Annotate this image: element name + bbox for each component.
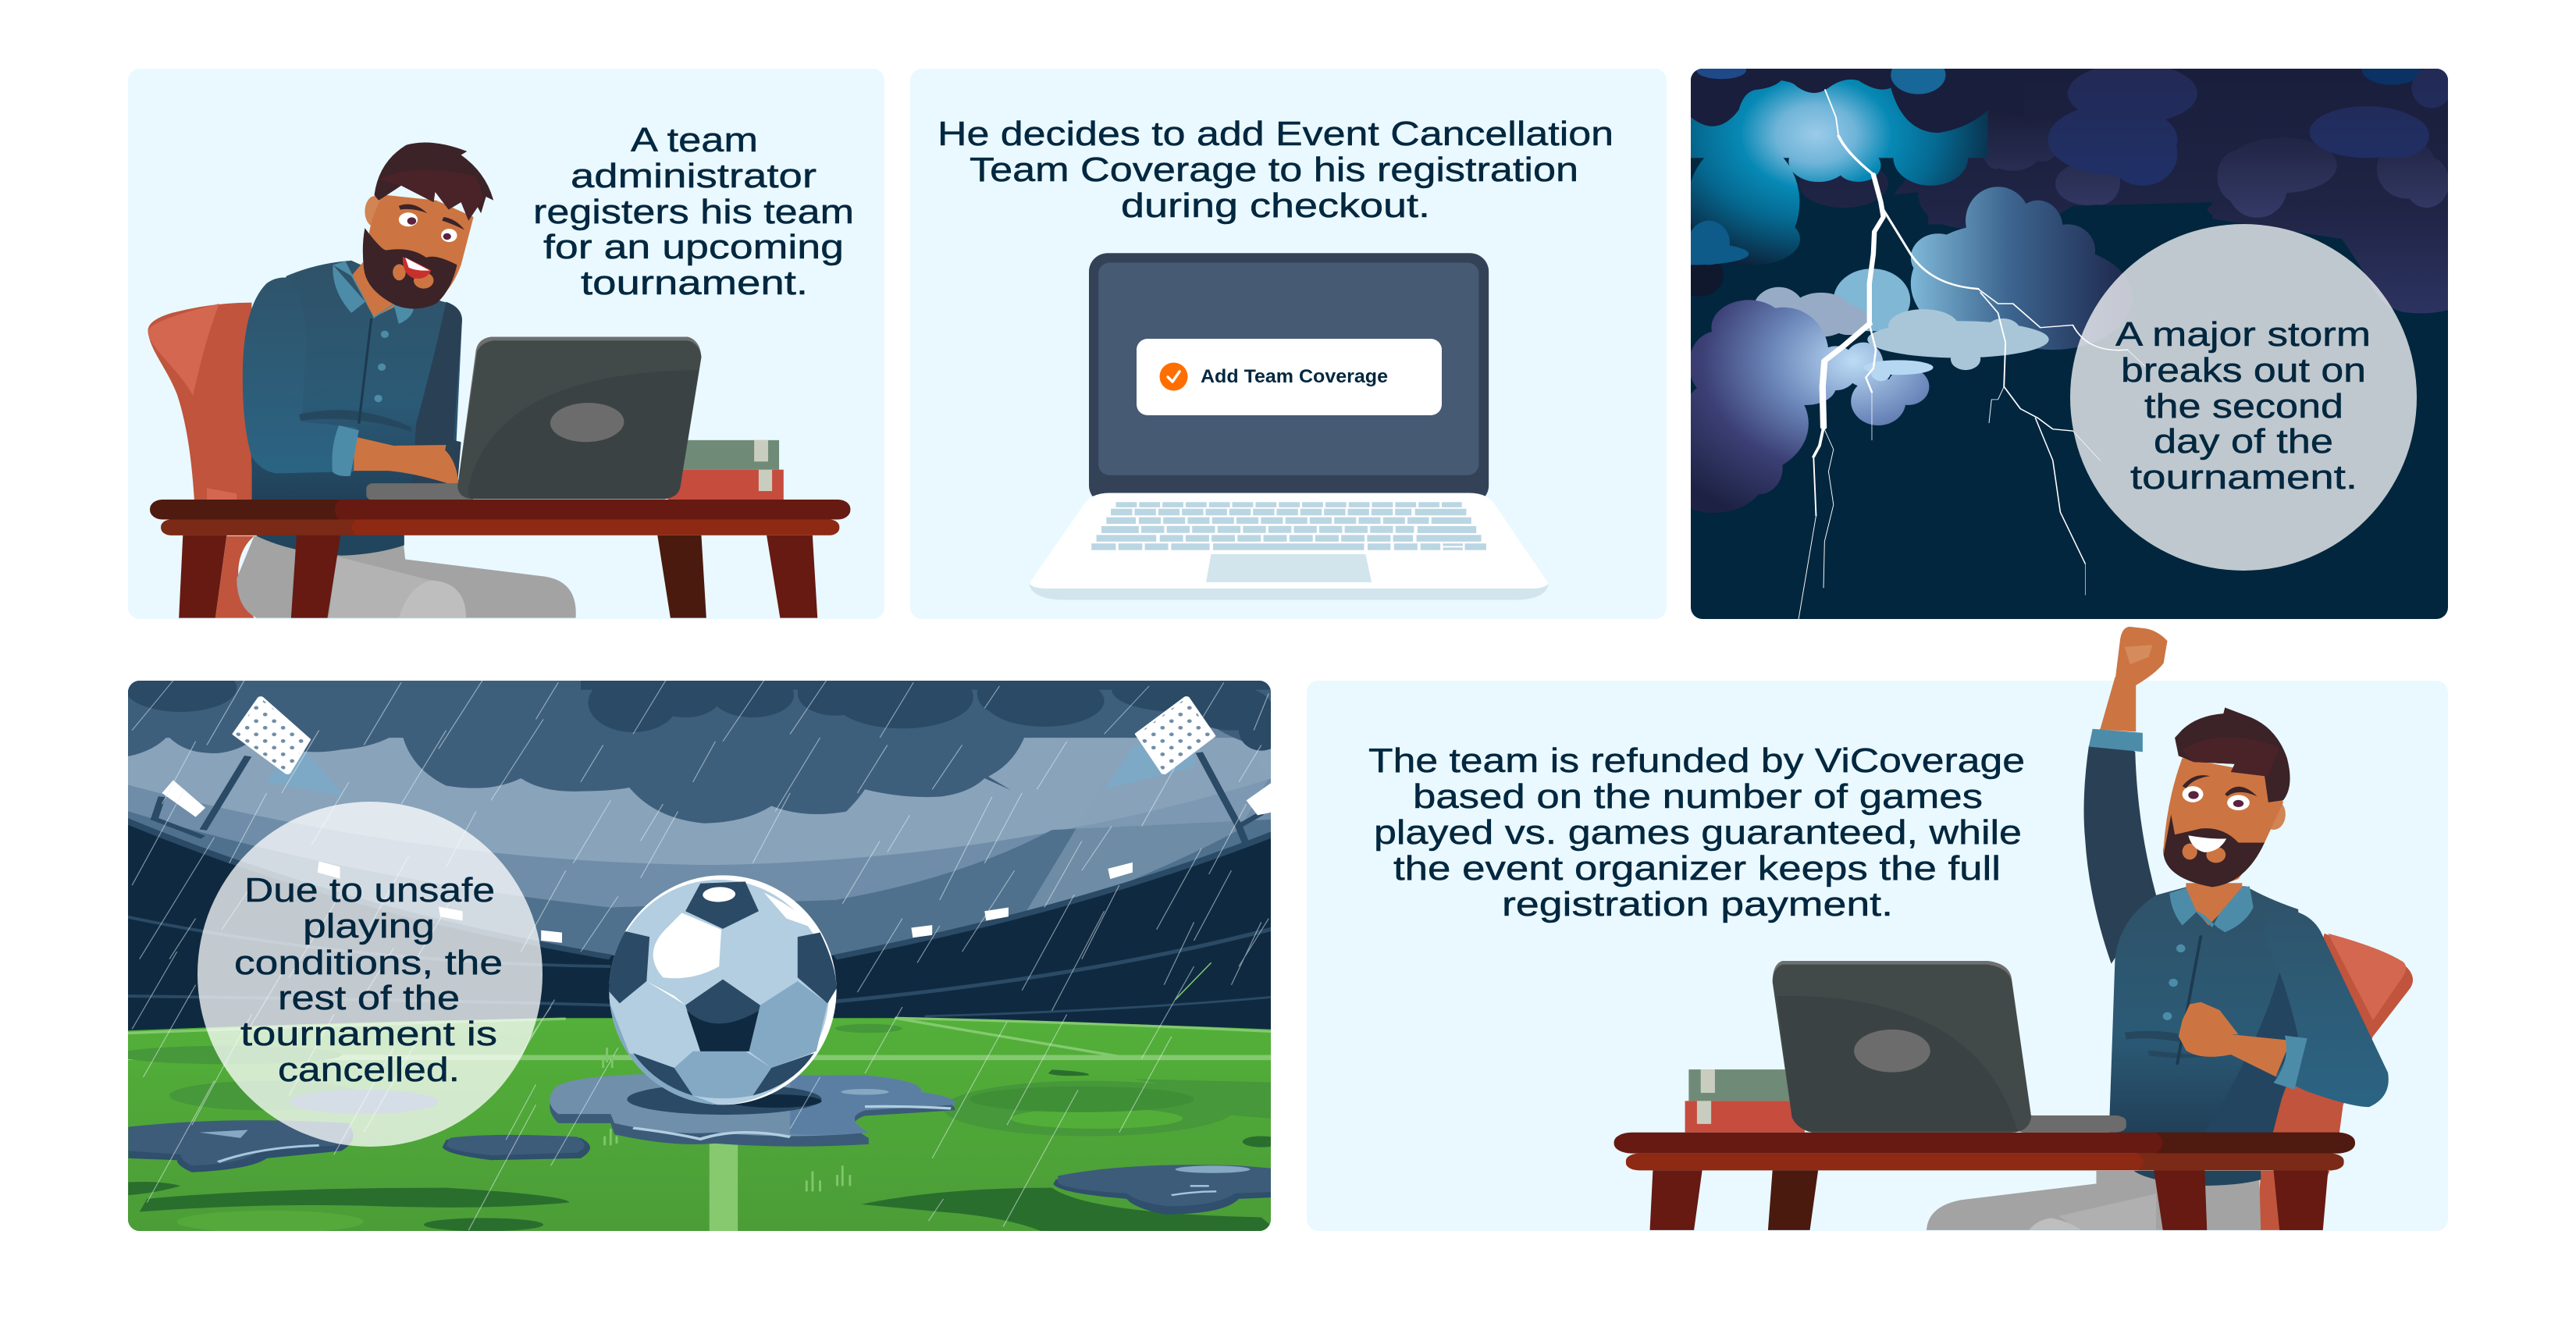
text: step 3: A major storm — [2115, 315, 2371, 354]
text: step 5: registration payment. — [1502, 885, 1893, 923]
text: step 5 — [1368, 742, 2025, 923]
panel: storm — [1639, 54, 2452, 619]
illustration: man at laptop — [148, 142, 850, 618]
text: step 1: for an upcoming — [543, 228, 844, 266]
callout circle: cancellation — [197, 802, 543, 1147]
illustration: stadium, ball and rain — [117, 664, 1283, 1236]
text: step 3: the second — [2144, 387, 2343, 425]
text: step 5: The team is refunded by ViCoverage — [1368, 742, 2025, 780]
light tower left — [155, 698, 308, 838]
text: step 3: day of the — [2154, 422, 2333, 461]
soccer ball — [596, 875, 837, 1107]
text: step 2: during checkout. — [1121, 187, 1430, 225]
illustration: storm clouds and lightning — [1639, 54, 2452, 619]
text: step 5: based on the number of games — [1413, 777, 1983, 816]
illustration: open laptop — [1029, 253, 1549, 600]
text: step 1: administrator — [571, 157, 817, 195]
illustration: celebrating man at laptop — [1614, 627, 2413, 1230]
panel: rained out stadium — [117, 664, 1283, 1236]
callout circle: storm — [2070, 224, 2417, 571]
puddle under ball — [550, 1074, 955, 1147]
panel: add team coverage — [910, 69, 1667, 619]
text: step 4: playing — [303, 907, 435, 945]
panel: refund — [1307, 627, 2448, 1231]
text: step 1 — [533, 121, 854, 302]
text: step 4: Due to unsafe — [244, 871, 495, 909]
text: step 3: tournament. — [2130, 458, 2357, 496]
text: step 4: rest of the — [278, 979, 460, 1017]
infographic canvas — [128, 69, 2448, 1231]
text: step 1: A team — [631, 121, 758, 159]
text: step 3 — [2115, 315, 2371, 496]
label: add team coverage: Add Team Coverage — [1201, 366, 1388, 387]
text: step 4: tournament is — [240, 1015, 497, 1053]
checkbox card — [1137, 339, 1442, 415]
icon: orange check — [1160, 362, 1188, 390]
text: step 5: the event organizer keeps the full — [1393, 849, 2001, 888]
text: step 4: conditions, the — [234, 944, 503, 982]
light tower right — [1138, 698, 1283, 845]
text: step 3: breaks out on — [2121, 351, 2366, 390]
storm clouds — [128, 681, 1271, 824]
text: step 1: registers his team — [533, 193, 854, 231]
text: step 2: Team Coverage to his registration — [970, 151, 1578, 189]
text: step 2 — [938, 115, 1614, 225]
text: step 5: played vs. games guaranteed, while — [1374, 813, 2022, 852]
rain — [132, 678, 1268, 1230]
panel: team administrator registers — [128, 69, 884, 619]
text: step 4 — [234, 871, 503, 1089]
text: step 1: tournament. — [581, 264, 808, 302]
text: step 4: cancelled. — [278, 1051, 460, 1089]
text: step 2: He decides to add Event Cancellation — [938, 115, 1614, 153]
